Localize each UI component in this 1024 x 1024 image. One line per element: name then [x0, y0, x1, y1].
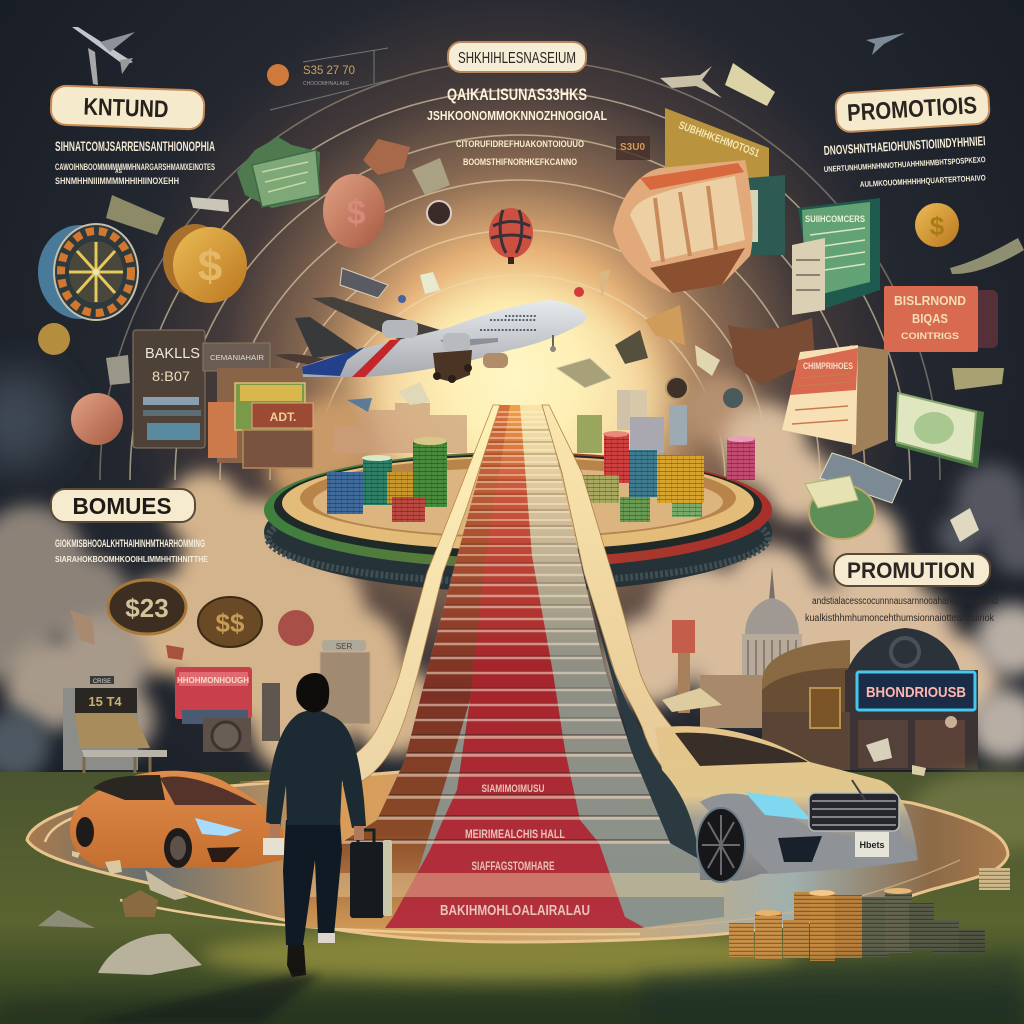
gold coin: $ [198, 242, 222, 291]
title subtext: CITORUFIDREFHUAKONTOIOUUO [456, 139, 584, 149]
kiosk sign: 15 T4 [88, 694, 122, 709]
label: PROMOTIOIS [835, 84, 990, 133]
grey tower signs: SER [336, 642, 352, 651]
label: KNTUND: KNTUND [83, 93, 169, 123]
label: title pill: SHKHIHLESNASEIUM [458, 50, 576, 67]
green book and receipt [792, 198, 880, 315]
red card: BISLRNOND [894, 293, 966, 308]
neon sign: BHONDRIOUSB [866, 684, 966, 701]
small price note [616, 136, 650, 160]
receipt book: CHIMPRIHOES [803, 361, 853, 371]
title subtext [427, 85, 607, 167]
dark plaque coins: $$ [216, 608, 245, 638]
coins left column [38, 323, 130, 445]
red card: BIQAS [912, 311, 948, 326]
person with suitcase [266, 673, 392, 977]
concentric arc lines [100, 60, 940, 480]
left handrail [240, 405, 500, 785]
small tan ticket [363, 139, 410, 175]
gold card [665, 108, 769, 178]
receipt book [782, 345, 888, 455]
stair captions: BAKIHMOHLOALAIRALAU [440, 902, 590, 919]
board BAKLLS: CEMANIAHAIR [210, 355, 264, 362]
gold coin right [915, 203, 959, 247]
plane and bill upper right of centre [660, 63, 775, 106]
silver car: Hbets [859, 840, 885, 850]
storefront [762, 628, 978, 770]
KNTUND description: SHNMHHNIIIMMMMHHIHIINOXEHH [55, 176, 179, 186]
PROMOTIOIS description [823, 133, 986, 189]
title subtext: BOOMSTHIFNORHKEFKCANNO [463, 157, 577, 167]
BOMUES description [55, 538, 209, 564]
KNTUND description: SIHNATCOMJSARRENSANTHIONOPHIA [55, 138, 215, 154]
BOMUES description: GIOKMISBHOOALKHTHAIHINHMTHARHOMMING [55, 538, 205, 550]
banknote right [950, 238, 1024, 274]
flying notes near shop [662, 688, 957, 776]
capitol building [672, 567, 802, 728]
teal book [744, 175, 785, 255]
stair captions: SIAFFAGSTOMHARE [472, 859, 554, 873]
neon sign [857, 672, 975, 710]
orange money wallet [613, 160, 752, 293]
red card [884, 286, 998, 352]
clouds: right [605, 374, 1024, 761]
label: PROMOTION [834, 554, 990, 586]
kiosk sign [63, 676, 167, 773]
left steps [305, 405, 510, 928]
dark plaque coins [70, 580, 314, 660]
grass [0, 770, 1024, 1024]
title subtext: JSHKOONOMMOKNNOZHNOGIOAL [427, 108, 607, 123]
label: BOMUES: BOMUES [72, 493, 172, 519]
small price note: S3U0 [620, 142, 645, 153]
small plane top right [866, 33, 905, 55]
red sign board: HHOHMONHOUGH [177, 676, 249, 685]
PROMOTION description [805, 596, 998, 624]
tickets scattered near plane [340, 268, 743, 412]
small coin with figures [267, 48, 390, 110]
green bill [896, 393, 984, 468]
KNTUND description [55, 138, 215, 186]
green book and receipt: SUIIHCOMCERS [805, 214, 865, 224]
brown wallet [728, 318, 815, 385]
green bills [237, 137, 320, 208]
red carpet [385, 405, 645, 928]
copper coin: $ [347, 194, 366, 232]
gold card: SUBHIHKEHMOTOS1 [677, 120, 761, 160]
title subtext: QAIKALISUNAS33HKS [447, 85, 587, 104]
board BAKLLS [133, 330, 270, 448]
road ring [27, 772, 1008, 942]
bottom treads [295, 873, 735, 897]
copper coin [323, 174, 385, 248]
label: PROMOTION: PROMUTION [847, 558, 975, 583]
dark side wall of staircase [575, 540, 712, 885]
stacked colourful cards [208, 368, 313, 468]
PROMOTION description: kualkisthhmhumoncehthumsionnaiotteanesiinok [805, 613, 995, 624]
distant city [333, 390, 687, 453]
red card: COINTRIGS [901, 331, 959, 341]
label: title pill [448, 42, 586, 72]
small coin with figures: CHOOOMHNALAKE [303, 81, 350, 87]
small plane top left [72, 27, 135, 85]
PROMOTIOIS description: AULMKOUOMHHHHHQUARTERTOHAIVO [860, 173, 986, 189]
gold coin right: $ [930, 211, 945, 241]
orange car [70, 771, 284, 868]
stair captions: SIAMIMOIMUSU [482, 783, 545, 795]
label: KNTUND [50, 85, 205, 130]
stair captions: MEIRIMEALCHIS HALL [465, 827, 565, 841]
KNTUND description: AS [115, 169, 123, 175]
clouds: left [0, 370, 440, 780]
grey tower signs [262, 640, 370, 741]
green coin and notes [805, 453, 979, 542]
red sign board [175, 667, 252, 752]
poker chip stacks [327, 431, 755, 522]
board BAKLLS: BAKLLS [145, 345, 200, 362]
dark plaque coins: $23 [125, 593, 169, 623]
KNTUND description: CAWOIHNBOOMMMMMMMHNARGARSHMAMXEINOTES [55, 162, 215, 172]
floating banknotes left [106, 195, 229, 235]
label: BOMUES [51, 489, 195, 522]
dart wheel [38, 224, 138, 320]
kiosk sign: CRISE [93, 679, 111, 685]
staircase [295, 400, 735, 930]
BOMUES description: SIARAHOKBOOMHKOOIHLIMMHHTIHNITTHE [55, 555, 209, 564]
loose notes on grass [38, 851, 202, 975]
board BAKLLS: 8:B07 [152, 368, 190, 384]
label: PROMOTIOIS: PROMOTIOIS [846, 92, 978, 127]
small coin with figures: S35 27 70 [303, 63, 355, 77]
coin stacks [729, 868, 1010, 961]
central airplane [275, 297, 587, 383]
paper note [412, 158, 450, 195]
small dark coin [427, 201, 451, 225]
casino ring platform [264, 452, 772, 592]
silver car [655, 726, 918, 882]
stair captions [440, 783, 590, 919]
foreground grass shadow [0, 955, 1024, 1024]
right handrail [542, 405, 722, 805]
hot air balloon [489, 208, 533, 264]
stacked colourful cards: ADT. [270, 410, 296, 424]
gold coin [163, 224, 247, 303]
small note [952, 368, 1004, 390]
